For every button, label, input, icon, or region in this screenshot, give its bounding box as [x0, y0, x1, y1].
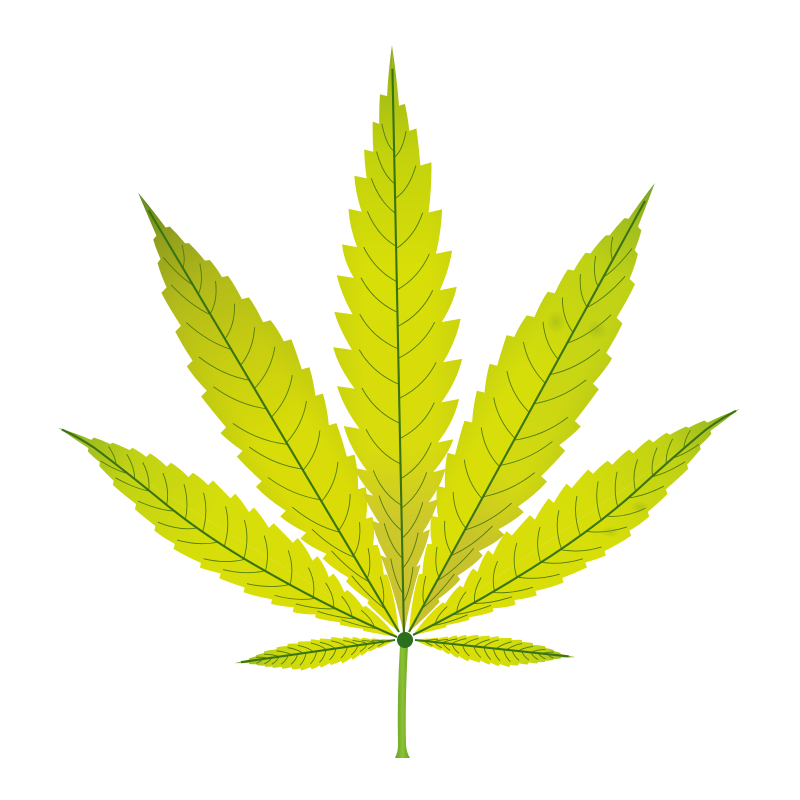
leaflet: bottom left — [233, 627, 397, 680]
leaflet: bottom right — [413, 627, 576, 674]
leaflet: lower right — [392, 379, 765, 672]
stem — [395, 645, 410, 758]
leaf discolouration patches — [546, 310, 650, 538]
leaflet: upper right — [358, 155, 700, 657]
leaflet: centre — [327, 44, 468, 636]
leaflet: lower left — [35, 396, 416, 675]
leaf node — [397, 632, 413, 648]
leaflet: upper left — [93, 163, 449, 659]
